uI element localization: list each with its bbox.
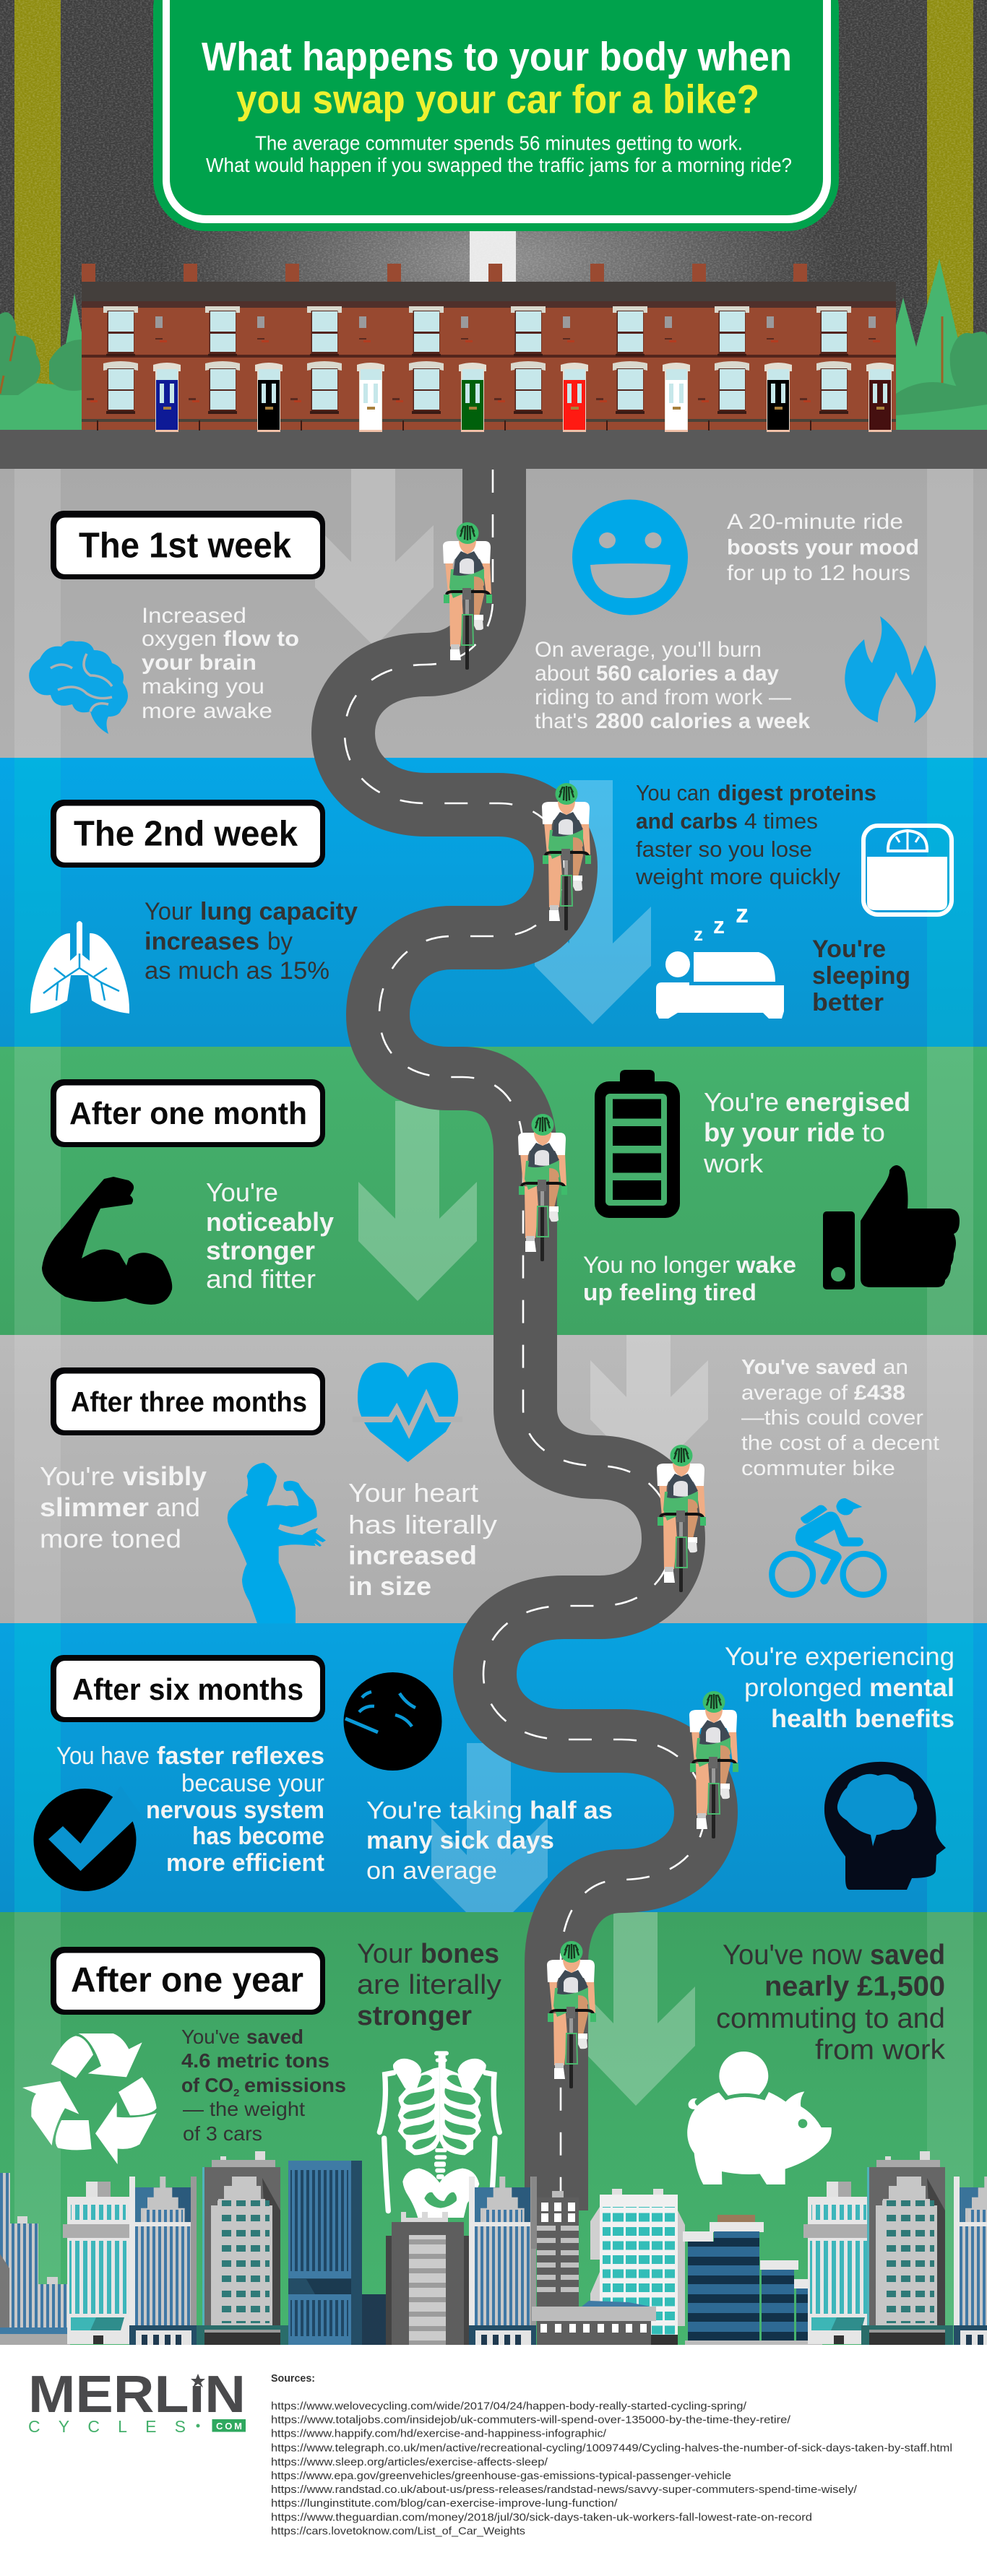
sources: https://www.randstad.co.uk/about-us/press-releases/randstad-news/savvy-super-commuters-spend-time-wisely/ bbox=[271, 2484, 858, 2496]
text: emissions: 2 bbox=[233, 2087, 239, 2099]
text: saved: —this could cover bbox=[741, 1406, 923, 1430]
text: digestion: You can bbox=[636, 780, 710, 805]
panel: after one month bbox=[42, 1070, 960, 1305]
panel: after three months bbox=[40, 1356, 939, 1623]
text: lung capacity: lung capacity bbox=[200, 898, 358, 925]
cyclist 5 bbox=[689, 1691, 738, 1838]
text: digestion bbox=[635, 780, 876, 889]
text: saved: an bbox=[883, 1356, 908, 1379]
heading: after three months bbox=[51, 1367, 325, 1435]
icon: recycling arrows bbox=[22, 2033, 157, 2164]
text: reflexes: faster reflexes bbox=[157, 1742, 324, 1770]
text: energised: by your ride bbox=[704, 1118, 855, 1147]
icon: flame bbox=[845, 616, 936, 723]
icon: thumbs up bbox=[823, 1165, 960, 1289]
text: emissions: 4.6 metric tons bbox=[181, 2049, 329, 2072]
heading: the 1st week bbox=[51, 511, 325, 579]
text: saved 1500: You've now bbox=[723, 1940, 863, 1971]
logo: merlin cycles: MERLIN bbox=[28, 2366, 246, 2424]
text: mood: boosts your mood bbox=[727, 536, 919, 559]
icon: lungs bbox=[30, 921, 129, 1013]
text: calories bbox=[535, 638, 810, 733]
text: reflexes: because your bbox=[181, 1770, 324, 1797]
text: slimmer: You're bbox=[40, 1461, 115, 1491]
cyclist 1 bbox=[443, 522, 492, 670]
text: emissions: emissions bbox=[244, 2074, 346, 2096]
text: mental health: You're experiencing bbox=[725, 1643, 954, 1671]
heading: after one year: After one year bbox=[71, 1961, 303, 2000]
text: energised bbox=[703, 1087, 910, 1178]
text: mental health: health benefits bbox=[771, 1705, 954, 1733]
grey tower bbox=[386, 2212, 469, 2345]
text: bones: stronger bbox=[357, 2001, 472, 2031]
text: bones: are literally bbox=[357, 1970, 501, 2000]
text: saved: average of bbox=[741, 1381, 848, 1404]
title: you swap your car for a bike? bbox=[236, 77, 759, 121]
background arrows bbox=[315, 469, 708, 2106]
text: sick days: on average bbox=[366, 1857, 497, 1885]
text: energised: work bbox=[703, 1149, 764, 1178]
cyclist 4 bbox=[657, 1445, 706, 1592]
text: sick days: You're taking bbox=[366, 1797, 522, 1825]
text: stronger: noticeably bbox=[206, 1207, 334, 1237]
text: reflexes: nervous system bbox=[146, 1797, 324, 1824]
text: sleeping better bbox=[812, 935, 910, 1016]
panel: after six months bbox=[33, 1643, 954, 1891]
heading: the 2nd week bbox=[51, 800, 325, 868]
text: stronger bbox=[206, 1177, 334, 1294]
background: asphalt top bbox=[0, 0, 987, 433]
text: wake up: wake bbox=[736, 1252, 796, 1278]
sources: https://lunginstitute.com/blog/can-exercise-improve-lung-function/ bbox=[271, 2497, 618, 2510]
text: saved 1500: nearly £1,500 bbox=[764, 1971, 945, 2002]
text: stronger: stronger bbox=[206, 1235, 315, 1266]
text: sick days: many sick days bbox=[366, 1827, 554, 1854]
subtitle: The average commuter spends 56 minutes getting to work. bbox=[255, 131, 743, 155]
doors bbox=[153, 363, 894, 432]
text: reflexes: You have bbox=[56, 1742, 150, 1770]
trees right bbox=[896, 259, 987, 430]
panel: the 1st week bbox=[29, 500, 936, 734]
text: wake up bbox=[583, 1252, 796, 1305]
icon: sleeping in bed: z bbox=[694, 923, 703, 945]
teal grid tower bbox=[590, 2189, 685, 2345]
icon: sleeping in bed: z bbox=[713, 912, 725, 938]
text: calories: 2800 calories a week bbox=[595, 709, 810, 733]
text: lung capacity: Your bbox=[145, 898, 192, 925]
heading: after one year bbox=[51, 1947, 325, 2015]
text: sleeping better: You're bbox=[812, 935, 886, 963]
subtitle: What would happen if you swapped the traffic jams for a morning ride? bbox=[206, 154, 792, 176]
text: digestion: faster so you lose bbox=[636, 837, 812, 862]
heading: after six months bbox=[51, 1655, 325, 1722]
text: digestion: digest proteins bbox=[717, 780, 876, 805]
heading: after one month bbox=[51, 1079, 325, 1147]
heading: the 2nd week: The 2nd week bbox=[74, 815, 298, 854]
road tower bbox=[531, 2177, 579, 2313]
text: mental health bbox=[725, 1643, 954, 1733]
icon: sad face bbox=[344, 1672, 442, 1771]
road: winding route bbox=[343, 462, 706, 2210]
text: saved 1500 bbox=[716, 1940, 946, 2066]
icon: battery bbox=[595, 1070, 680, 1218]
icon: weighing scale bbox=[863, 826, 952, 915]
text: digestion: and carbs bbox=[636, 808, 738, 834]
text: energised: You're bbox=[704, 1087, 779, 1117]
text: lung capacity bbox=[145, 898, 358, 985]
icon: piggy bank bbox=[687, 2052, 832, 2184]
heading: after three months: After three months bbox=[71, 1387, 307, 1418]
text: heart: in size bbox=[348, 1571, 431, 1601]
road band under houses bbox=[0, 430, 987, 469]
panel: the 2nd week bbox=[30, 780, 952, 1019]
icon: heart with pulse bbox=[353, 1362, 462, 1462]
text: mood: A 20-minute ride bbox=[727, 510, 903, 534]
text: oxygen: oxygen bbox=[142, 627, 217, 651]
text: oxygen bbox=[142, 604, 299, 723]
text: slimmer: visibly bbox=[123, 1461, 207, 1491]
text: emissions: saved bbox=[246, 2026, 303, 2048]
text: oxygen: flow to bbox=[223, 627, 299, 651]
text: heart: has literally bbox=[348, 1510, 497, 1539]
text: mental health: prolonged bbox=[744, 1674, 862, 1702]
text: calories: riding to and from work — bbox=[535, 686, 791, 709]
sources: https://cars.lovetoknow.com/List_of_Car_Weights bbox=[271, 2525, 525, 2537]
text: calories: On average, you'll burn bbox=[535, 638, 762, 662]
text: heart: increased bbox=[348, 1540, 477, 1570]
icon: skeleton bbox=[379, 2051, 499, 2218]
text: lung capacity: by bbox=[267, 928, 293, 955]
text: oxygen: more awake bbox=[142, 699, 272, 723]
sources: https://www.epa.gov/greenvehicles/greenhouse-gas-emissions-typical-passenger-vehicle bbox=[271, 2470, 731, 2482]
logo: merlin cycles: CYCLES bbox=[28, 2417, 186, 2436]
road sign: header bbox=[153, 0, 839, 231]
icon: brain bbox=[29, 641, 128, 734]
text: oxygen: Increased bbox=[142, 604, 246, 628]
cyclist 2 bbox=[542, 783, 591, 930]
text: calories: 560 calories a day bbox=[596, 662, 779, 686]
text: slimmer: more toned bbox=[40, 1524, 181, 1553]
dark blue block group bbox=[683, 2215, 823, 2345]
text: sick days bbox=[366, 1797, 613, 1885]
text: slimmer bbox=[40, 1461, 207, 1553]
text: wake up: up feeling tired bbox=[583, 1279, 757, 1305]
text: slimmer: slimmer bbox=[40, 1492, 149, 1522]
text: emissions: — the weight bbox=[183, 2098, 305, 2120]
text: digestion: weight more quickly bbox=[635, 864, 841, 889]
text: reflexes: has become bbox=[192, 1823, 324, 1850]
heading: after one month: After one month bbox=[69, 1096, 307, 1131]
icon: sleeping in bed: z bbox=[736, 899, 749, 928]
subtitle bbox=[206, 131, 792, 176]
text: lung capacity: as much as 15% bbox=[145, 957, 329, 985]
text: bones: bones bbox=[421, 1939, 499, 1969]
text: mood: for up to 12 hours bbox=[727, 561, 910, 585]
icon: smiley bbox=[572, 500, 688, 615]
text: calories: that's bbox=[535, 709, 588, 733]
text: lung capacity: increases bbox=[145, 928, 259, 955]
section backgrounds bbox=[0, 468, 987, 2346]
panel: after one year bbox=[22, 1939, 946, 2218]
sources: https://www.telegraph.co.uk/men/active/recreational-cycling/10097449/Cycling-halves-the-number-of-sick-days-taken-by-staff.html bbox=[271, 2442, 952, 2455]
house bay 1 bbox=[87, 306, 167, 414]
sources: https://www.welovecycling.com/wide/2017/04/24/happen-body-really-started-cycling-spring/ bbox=[271, 2400, 747, 2413]
logo: merlin cycles: COM bbox=[216, 2421, 242, 2432]
icon: flexed arm bbox=[42, 1177, 172, 1305]
icon: tick bbox=[33, 1786, 145, 1891]
text: mental health: mental bbox=[869, 1674, 954, 1702]
text: heart: Your heart bbox=[348, 1478, 478, 1508]
sources: Sources: bbox=[271, 2372, 315, 2385]
text: stronger: You're bbox=[206, 1177, 278, 1207]
text: sleeping better: better bbox=[812, 989, 884, 1016]
text: saved 1500: saved bbox=[870, 1940, 945, 1971]
text: saved: commuter bike bbox=[741, 1457, 895, 1480]
text: bones: Your bbox=[357, 1939, 413, 1969]
text: digestion: 4 times bbox=[744, 808, 818, 834]
dark blue tower bbox=[288, 2161, 386, 2345]
text: stronger: and fitter bbox=[206, 1264, 316, 1294]
text: sick days: half as bbox=[530, 1797, 613, 1825]
city skyline bbox=[0, 2151, 987, 2345]
title bbox=[202, 33, 792, 121]
text: reflexes: more efficient bbox=[166, 1849, 324, 1877]
cyclist 6 bbox=[547, 1941, 596, 2088]
text: oxygen: making you bbox=[142, 675, 264, 699]
text: energised: energised bbox=[785, 1087, 910, 1117]
heading: the 1st week: The 1st week bbox=[79, 526, 292, 565]
low grey block bbox=[532, 2301, 678, 2345]
text: emissions: of 3 cars bbox=[183, 2122, 262, 2145]
icon: sleeping in bed bbox=[656, 899, 784, 1019]
sources: https://www.happify.com/hd/exercise-and-happiness-infographic/ bbox=[271, 2427, 607, 2440]
text: emissions bbox=[181, 2026, 346, 2145]
icon: head with brain bbox=[824, 1762, 946, 1890]
text: emissions: of CO bbox=[181, 2074, 233, 2096]
icon: commuter cyclist bbox=[772, 1498, 884, 1595]
sources: https://www.theguardian.com/money/2018/jul/30/sick-days-taken-uk-workers-fall-lowest-rate-on-record bbox=[271, 2511, 812, 2524]
text: saved: £438 bbox=[854, 1381, 905, 1404]
text: wake up: You no longer bbox=[583, 1252, 730, 1278]
text: mood bbox=[727, 510, 919, 585]
chimneys bbox=[82, 264, 807, 282]
text: saved bbox=[741, 1356, 939, 1480]
text: reflexes bbox=[56, 1742, 324, 1877]
text: saved: the cost of a decent bbox=[741, 1432, 939, 1455]
text: saved: You've saved bbox=[741, 1356, 876, 1379]
sources: https://www.sleep.org/articles/exercise-affects-sleep/ bbox=[271, 2456, 548, 2468]
terraced houses bbox=[82, 264, 896, 432]
title: What happens to your body when bbox=[202, 33, 792, 79]
sources: https://www.totaljobs.com/insidejob/uk-commuters-will-spend-over-135000-by-the-time-they-retire/ bbox=[271, 2414, 791, 2426]
text: saved 1500: commuting to and bbox=[716, 2003, 945, 2034]
sources bbox=[271, 2372, 952, 2537]
heading: after six months: After six months bbox=[72, 1672, 303, 1706]
footer background bbox=[0, 2345, 987, 2576]
text: energised: to bbox=[862, 1118, 885, 1147]
cyclist 3 bbox=[518, 1114, 567, 1261]
text: oxygen: your brain bbox=[142, 651, 257, 675]
icon: muscle man bbox=[228, 1463, 326, 1623]
text: saved 1500: from work bbox=[815, 2034, 946, 2066]
text: emissions: You've bbox=[181, 2026, 240, 2048]
text: calories: about bbox=[535, 662, 590, 686]
text: bones bbox=[357, 1939, 501, 2031]
text: sleeping better: sleeping bbox=[812, 962, 910, 990]
trees left bbox=[0, 293, 82, 430]
text: heart bbox=[348, 1478, 497, 1601]
text: slimmer: and bbox=[156, 1492, 200, 1522]
